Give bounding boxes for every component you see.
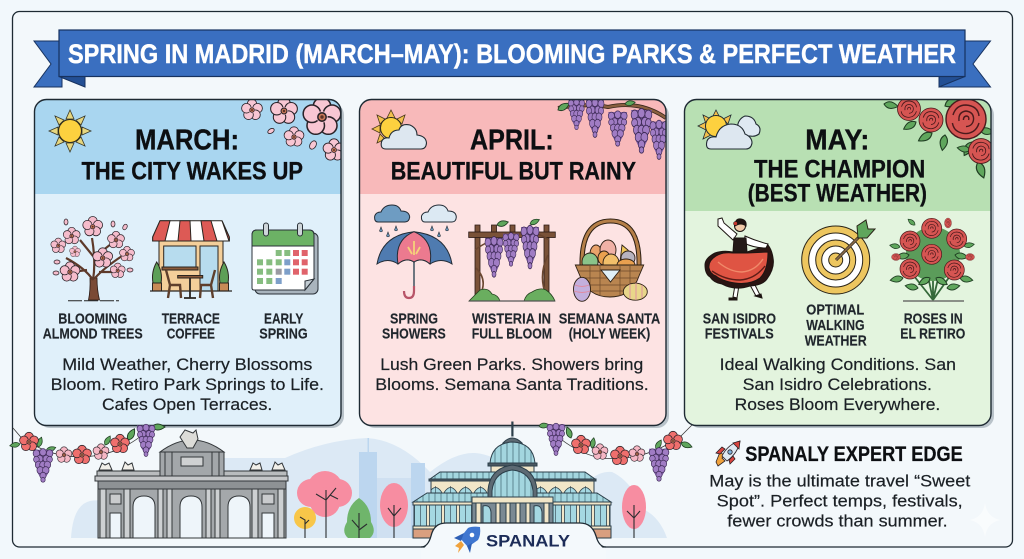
description: Blooms. Semana Santa Traditions. [375,375,649,394]
icon: dancer [705,218,773,300]
banner body [59,30,965,76]
logo wordmark: SPANALY [486,532,571,551]
item labels [382,310,660,343]
description: San Isidro Celebrations. [743,375,932,394]
callout body: fewer crowds than summer. [727,512,948,531]
item labels: EARLY [264,310,303,328]
icon: rose bush [889,218,975,301]
description: Roses Bloom Everywhere. [735,395,940,414]
puerta de alcala [95,430,288,538]
callout body: May is the ultimate travel “Sweet [709,472,971,491]
icon: small rocket [716,441,740,466]
cherry blossom corner [242,97,345,160]
callout heading: SPANALY EXPERT EDGE [745,443,963,466]
heading: MAY: [805,124,869,156]
icon: calendar [252,223,318,294]
description: Cafes Open Terraces. [102,395,272,414]
item labels [43,310,308,343]
item labels: BLOOMING [58,310,127,328]
left floral garland [9,424,165,482]
item labels: SHOWERS [382,326,446,343]
item labels: OPTIMAL [806,302,864,319]
panel: march [34,97,345,428]
description [51,355,324,414]
panel: may [684,95,995,428]
wisteria corner [556,98,668,159]
icon: wisteria pergola [469,217,555,301]
item labels: TERRACE [162,310,220,328]
icon: rain umbrella [375,205,456,298]
item labels [703,302,966,349]
expert edge callout [709,441,971,531]
callout body [709,472,971,531]
heading: APRIL: [470,124,554,156]
banner right tail [939,41,990,87]
subheading [748,156,927,208]
banner left tail [34,41,62,87]
item labels: ALMOND TREES [43,326,143,343]
right floral garland [539,423,693,481]
item labels: SPRING [390,310,438,328]
skyline backdrop [71,438,667,538]
item labels: ROSES IN [904,310,963,328]
icon: terrace cafe [150,221,232,298]
item labels: SAN ISIDRO [703,310,776,328]
icon: target [802,220,875,294]
description [720,355,956,414]
icon: easter basket [574,221,647,301]
icon: sun and cloud [372,110,426,149]
item labels: SPRING [259,326,308,343]
subheading: (BEST WEATHER) [748,180,927,208]
item labels: COFFEE [167,326,215,343]
item labels: (HOLY WEEK) [569,326,650,343]
panel: april [360,98,669,428]
description: Ideal Walking Conditions. San [720,355,956,374]
crystal palace [413,422,611,538]
item labels: WALKING [806,317,865,334]
sparkle [970,503,1000,537]
heading: MARCH: [135,124,239,156]
item labels: WISTERIA IN [472,310,551,328]
icon: sun [49,110,91,152]
spanaly logo tab [421,523,606,559]
item labels: EL RETIRO [900,326,966,343]
item labels: FESTIVALS [705,326,774,343]
icon: sun and clouds [698,110,760,149]
trees [294,471,646,538]
icon: logo rocket [454,527,480,553]
item labels: FULL BLOOM [472,326,552,343]
description [375,355,649,394]
subheading: THE CHAMPION [754,156,925,184]
description: Mild Weather, Cherry Blossoms [62,355,312,374]
description: Lush Green Parks. Showers bring [380,355,643,374]
item labels: SEMANA SANTA [559,310,660,328]
subheading: THE CITY WAKES UP [82,158,303,186]
item labels: WEATHER [805,332,867,349]
title banner [34,30,990,87]
description: Bloom. Retiro Park Springs to Life. [51,375,324,394]
subheading: BEAUTIFUL BUT RAINY [391,158,636,186]
icon: almond tree [51,216,134,301]
rose corner [883,95,995,179]
callout body: Spot”. Perfect temps, festivals, [717,492,963,511]
